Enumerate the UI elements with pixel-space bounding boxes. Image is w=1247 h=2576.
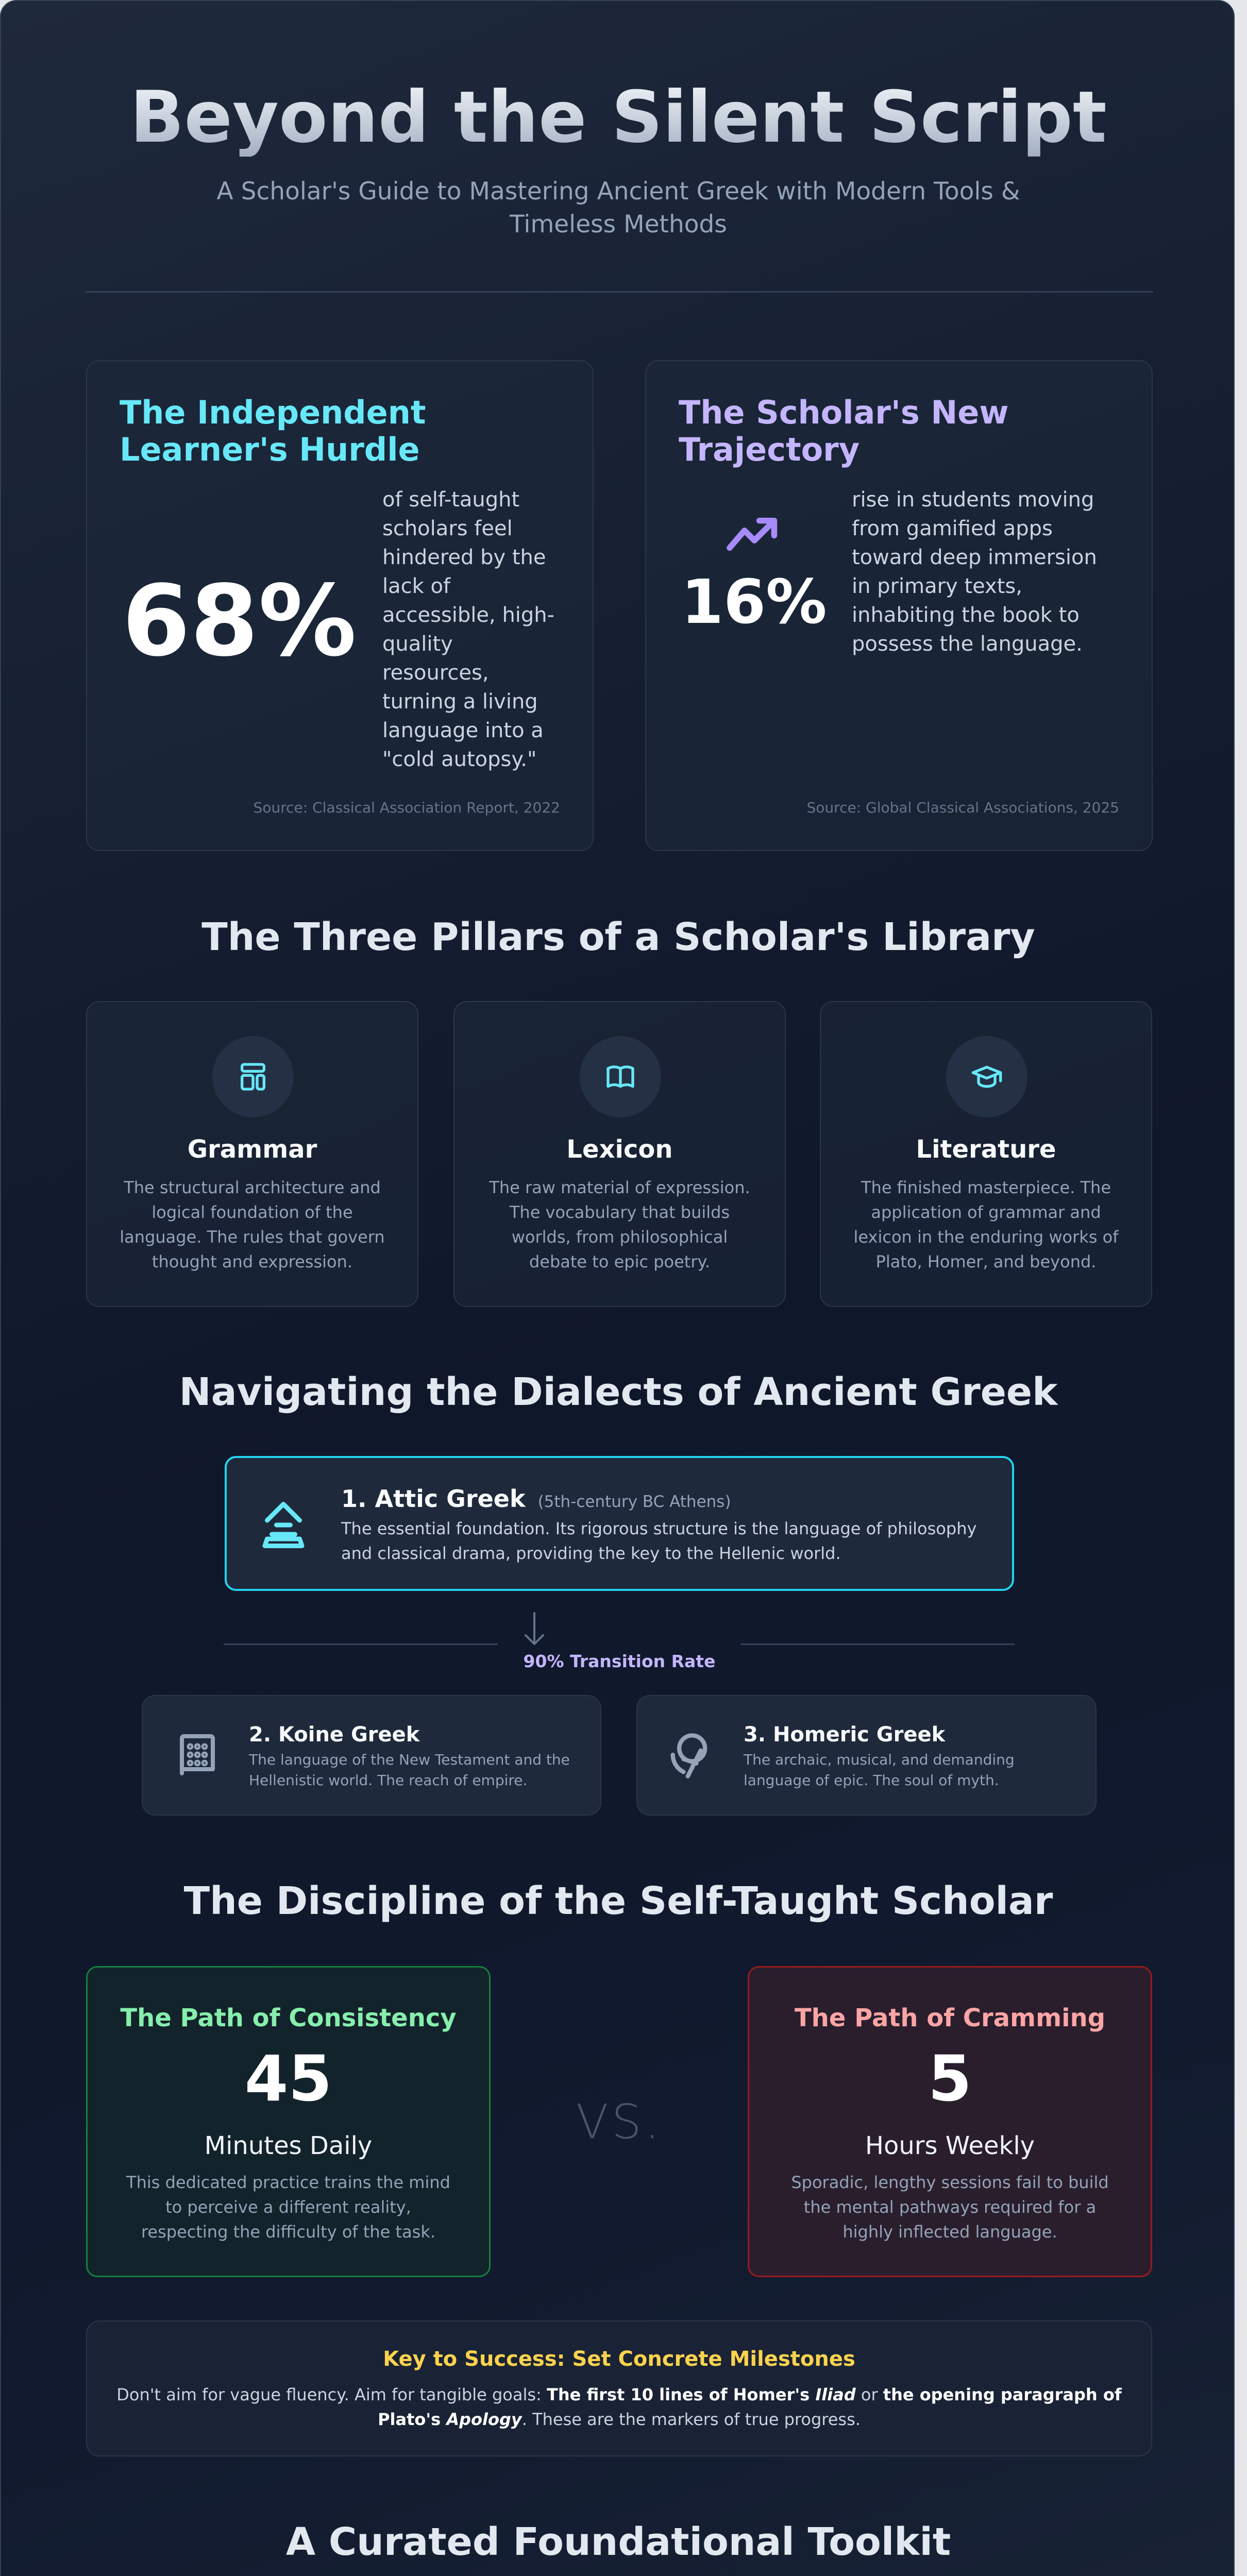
stat: 5: 5 xyxy=(928,2042,972,2115)
heading: hurdle xyxy=(120,394,426,468)
heading: consistency: The Path of Consistency xyxy=(120,2004,457,2032)
text: vs: VS. xyxy=(576,2094,663,2149)
label: hours weekly: Hours Weekly xyxy=(865,2131,1035,2160)
panel: grammar pillar xyxy=(86,1001,418,1307)
panel: path of cramming xyxy=(748,1966,1152,2277)
icon: lyre xyxy=(671,1733,707,1778)
icon: graduation cap xyxy=(946,1036,1027,1117)
title: grammar: Grammar xyxy=(188,1135,317,1164)
subtitle: A Scholar's Guide to Mastering Ancient Greek with Modern Tools & Timeless Methods xyxy=(217,177,1020,239)
arrow: transition xyxy=(525,1612,544,1646)
text: attic greek: The essential foundation. Its rigorous structure is the language of philosophy and classical drama, providing the key to the Hellenic world. xyxy=(341,1519,976,1563)
stat: 68%: 68% xyxy=(122,564,357,678)
panel: lexicon pillar xyxy=(453,1001,786,1307)
title: attic greek: 1. Attic Greek (5th-century BC Athens) xyxy=(341,1485,731,1513)
panel: path of consistency xyxy=(86,1966,491,2277)
text: grammar: The structural architecture and logical foundation of the language. The rules that govern thought and expression. xyxy=(120,1178,385,1272)
heading: discipline: The Discipline of the Self-Taught Scholar xyxy=(184,1879,1053,1923)
panel: literature pillar xyxy=(820,1001,1152,1307)
stat: 16%: 16% xyxy=(681,566,827,637)
icon: grid document xyxy=(180,1734,215,1775)
text: homeric: The archaic, musical, and demanding language of epic. The soul of myth. xyxy=(744,1751,1015,1789)
heading: dialects: Navigating the Dialects of Ancient Greek xyxy=(179,1370,1057,1414)
heading: hurdle: The Independent xyxy=(120,394,426,431)
icon: book xyxy=(580,1036,661,1117)
heading: trajectory: Trajectory xyxy=(679,431,860,468)
text: hurdle description: of self-taught scholars feel hindered by the lack of accessible, high-quality resources, turning a living language into a "cold autopsy." xyxy=(382,488,554,771)
text: literature: The finished masterpiece. The application of grammar and lexicon in the enduring works of Plato, Homer, and beyond. xyxy=(853,1178,1118,1272)
label: transition rate: 90% Transition Rate xyxy=(524,1651,715,1671)
icon: layout xyxy=(212,1036,294,1117)
source: trajectory: Source: Global Classical Associations, 2025 xyxy=(807,799,1119,816)
text: cramming: Sporadic, lengthy sessions fail to build the mental pathways required for a highly inflected language. xyxy=(791,2173,1109,2242)
heading: trajectory xyxy=(679,394,1009,468)
text: lexicon: The raw material of expression. The vocabulary that builds worlds, from philosophical debate to epic poetry. xyxy=(489,1178,750,1272)
icon: pyramid xyxy=(263,1502,304,1548)
callout: key to success xyxy=(86,2320,1152,2456)
heading: toolkit: A Curated Foundational Toolkit xyxy=(286,2520,951,2564)
title: koine: 2. Koine Greek xyxy=(249,1723,419,1747)
label: minutes daily: Minutes Daily xyxy=(205,2131,372,2160)
heading: cramming: The Path of Cramming xyxy=(795,2004,1105,2032)
panel: scholar's new trajectory xyxy=(645,360,1153,851)
panel: independent learner's hurdle xyxy=(86,360,594,851)
heading: three pillars: The Three Pillars of a Scholar's Library xyxy=(201,915,1035,959)
panel: koine greek xyxy=(142,1695,601,1816)
text: trajectory description: rise in students moving from gamified apps toward deep immersion in primary texts, inhabiting the book to possess the language. xyxy=(852,488,1097,656)
panel: attic greek xyxy=(225,1456,1014,1591)
text: milestones: Don't aim for vague fluency. Aim for tangible goals: The first 10 lines of Homer's Iliad or the opening paragraph of Plato's Apology. These are the markers of true progress. xyxy=(116,2385,1122,2429)
heading: hurdle: Learner's Hurdle xyxy=(120,431,419,468)
title: lexicon: Lexicon xyxy=(566,1135,673,1164)
source: hurdle: Source: Classical Association Report, 2022 xyxy=(254,799,560,816)
panel: homeric greek xyxy=(636,1695,1097,1816)
icon: trending up xyxy=(727,517,777,551)
text: koine: The language of the New Testament and the Hellenistic world. The reach of empire. xyxy=(249,1751,570,1789)
stat: 45: 45 xyxy=(245,2042,332,2115)
heading: trajectory: The Scholar's New xyxy=(679,394,1009,431)
title: Beyond the Silent Script xyxy=(130,76,1107,159)
title: homeric: 3. Homeric Greek xyxy=(744,1723,945,1747)
title: literature: Literature xyxy=(916,1135,1056,1164)
text: consistency: This dedicated practice trains the mind to perceive a different reality, respecting the difficulty of the task. xyxy=(126,2173,450,2242)
heading: key to success: Key to Success: Set Concrete Milestones xyxy=(383,2347,855,2371)
